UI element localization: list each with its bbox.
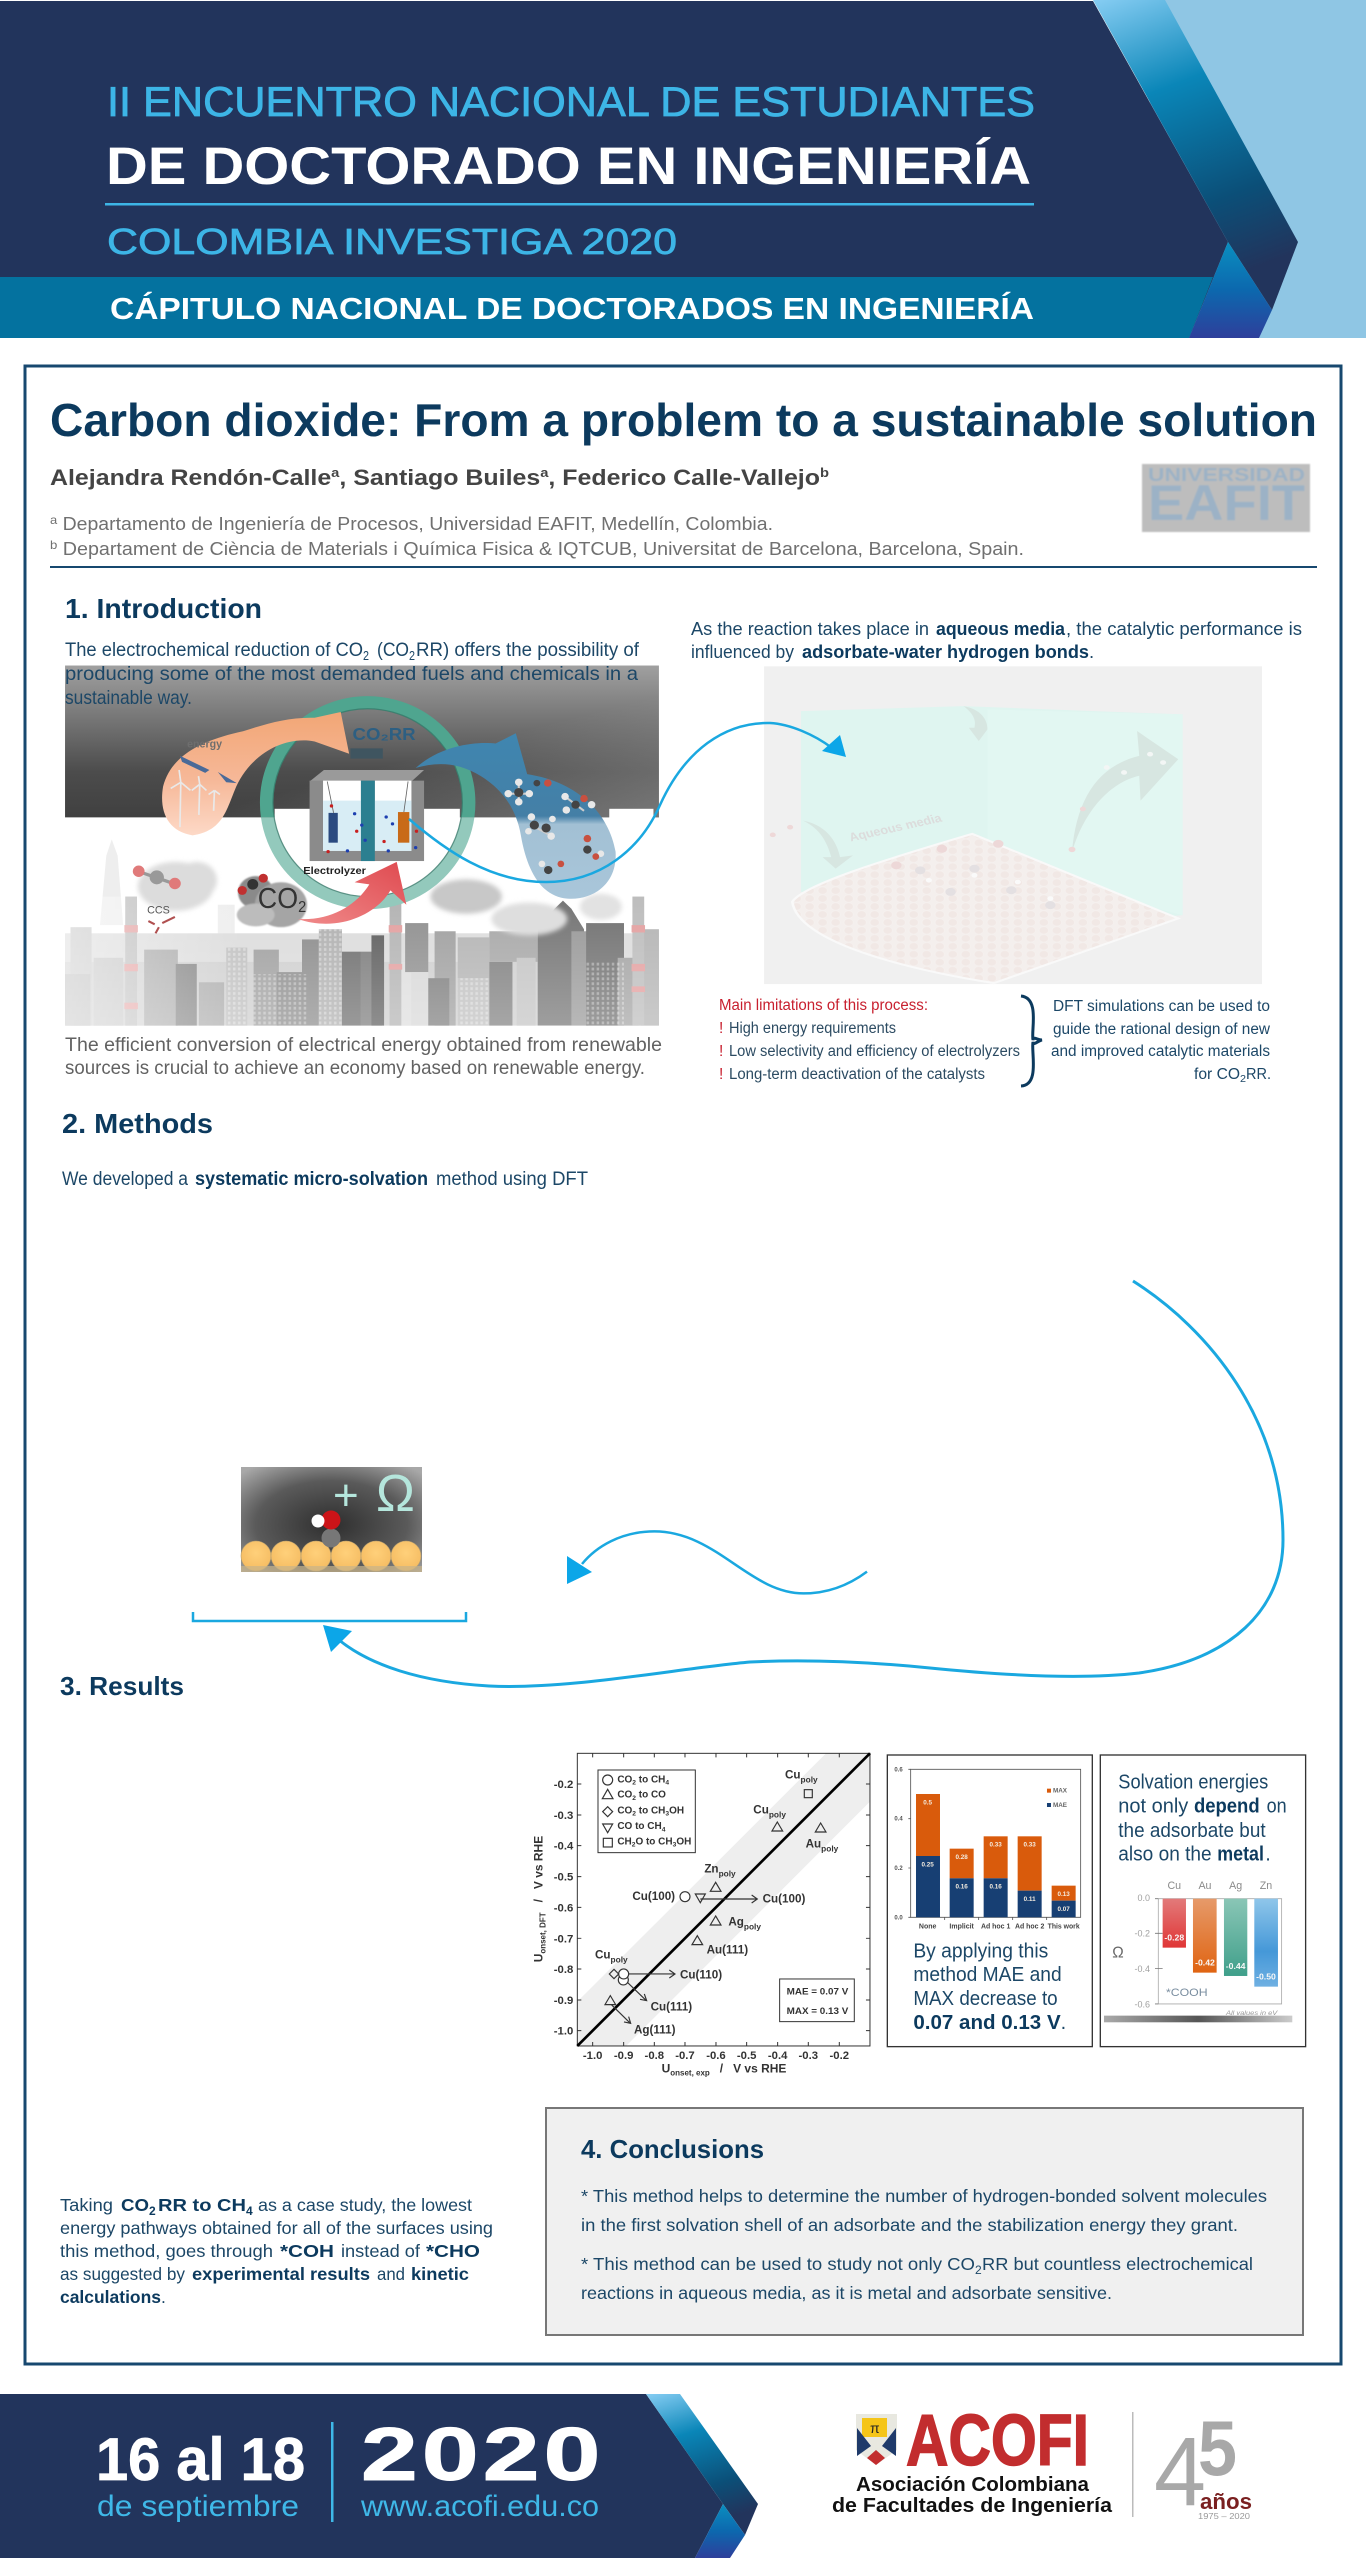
diagram: CO2RR cycle over city xyxy=(65,666,659,1026)
image: solvation correction adsorbate: + xyxy=(333,1471,359,1520)
legend: 4 xyxy=(665,1780,669,1787)
text: intro paragraph: producing some of the most demanded fuels and chemicals in a xyxy=(65,663,638,685)
x axis tick labels: -0.3 xyxy=(799,2050,818,2062)
legend: CO xyxy=(617,1774,632,1785)
label: CO2: 2 xyxy=(298,899,306,916)
logo: 45 años xyxy=(1154,2404,1252,2526)
error stats box: MAE = 0.07 V xyxy=(787,1986,848,1996)
text: DFT simulations: RR. xyxy=(1246,1066,1271,1083)
text: conclusion bullets xyxy=(581,2186,1267,2303)
text: intro paragraph: RR) offers the possibility of xyxy=(416,639,640,661)
bar chart: Omega per metal: *COOH xyxy=(1166,1987,1208,1999)
bar chart: 0.28 xyxy=(955,1854,968,1861)
skyline xyxy=(65,897,659,1026)
text: efficient conversion: The efficient conversion of electrical energy obtained from renewable xyxy=(65,1034,662,1056)
arrow: captured CO2 xyxy=(298,862,406,924)
text: case study: Taking xyxy=(60,2195,113,2215)
text: MAE and MAX conclusion: method MAE and xyxy=(913,1964,1062,1986)
text: case study: energy pathways obtained for all of the surfaces using xyxy=(60,2218,493,2238)
bar chart: None xyxy=(919,1924,937,1931)
data labels: poly xyxy=(821,1843,839,1853)
date: 16 al 18 xyxy=(96,2426,305,2493)
arrow: long curve to bracket xyxy=(323,1281,1283,1686)
legend: 3 xyxy=(673,1842,677,1849)
text: DFT simulations: for CO xyxy=(1194,1066,1240,1083)
legend: OH xyxy=(676,1836,691,1847)
legend: CH xyxy=(617,1836,632,1847)
logo: 45 años: 1975 – 2020 xyxy=(1198,2512,1251,2521)
error stats box xyxy=(780,1979,854,2022)
text: aqueous media: aqueous media xyxy=(936,618,1066,639)
text: case study: CO xyxy=(121,2195,149,2215)
heading: chapter band: CÁPITULO NACIONAL DE DOCTORADOS EN INGENIERÍA xyxy=(110,291,1034,326)
text: conclusion bullets: * This method can be used to study not only CO xyxy=(581,2254,975,2274)
x axis title: / V vs RHE xyxy=(710,2062,786,2076)
text: case study: this method, goes through xyxy=(60,2241,273,2261)
bar chart: Omega per metal: -0.2 xyxy=(1134,1929,1150,1939)
bar chart: Ad hoc 2 xyxy=(1015,1924,1044,1931)
heading: event name line 2: DE DOCTORADO EN INGENIERÍA xyxy=(106,136,1031,196)
text: case study: 2 xyxy=(149,2204,156,2218)
bar chart: 0.33 xyxy=(1023,1842,1036,1849)
text: methods intro: systematic micro-solvation xyxy=(195,1169,428,1190)
bar chart: 0.13 xyxy=(1057,1891,1070,1898)
text: case study: as suggested by xyxy=(60,2264,185,2284)
legend: 2 xyxy=(632,1795,636,1802)
text: solvation energies: the adsorbate but xyxy=(1118,1820,1266,1842)
text: solvation energies: not only xyxy=(1118,1796,1188,1818)
legend: CO xyxy=(617,1790,632,1801)
electrolyzer cell xyxy=(310,748,424,861)
error stats box: MAX = 0.13 V xyxy=(787,2006,848,2016)
text: main limitations: ! xyxy=(719,1043,723,1060)
icon: product molecules xyxy=(504,779,604,874)
text: case study: *CHO xyxy=(426,2241,480,2261)
bar chart: Omega per metal xyxy=(1104,1880,1292,2022)
text: conclusion bullets: 2 xyxy=(975,2263,982,2277)
bar chart: Ad hoc 1 xyxy=(981,1924,1010,1931)
footer banner xyxy=(0,2394,758,2558)
text: case study xyxy=(60,2195,493,2307)
data labels: Zn xyxy=(704,1863,719,1876)
bar chart: Omega per metal: Ag xyxy=(1229,1880,1242,1892)
text: DFT simulations xyxy=(1051,998,1271,1085)
bar chart: Omega per metal: Ω xyxy=(1112,1944,1124,1961)
data labels: Cu xyxy=(595,1948,611,1961)
data labels: poly xyxy=(744,1921,761,1931)
x axis tick labels: -0.6 xyxy=(706,2050,726,2062)
affiliations: Departament de Ciència de Materials i Química Fisica & IQTCUB, Universitat de Barcelona, Barcelona, Spain. xyxy=(57,539,1024,559)
x axis tick labels: -0.9 xyxy=(614,2050,633,2062)
y axis tick labels: -0.8 xyxy=(554,1964,573,1976)
bar chart: Omega per metal: Zn xyxy=(1260,1880,1272,1892)
bar chart: 0.07 xyxy=(1057,1906,1070,1913)
poster title: Carbon dioxide: From a problem to a sustainable solution xyxy=(50,394,1317,446)
bar chart: 0.0 xyxy=(894,1915,903,1921)
text: aqueous media: adsorbate-water hydrogen bonds xyxy=(802,641,1089,662)
text: intro paragraph: (CO xyxy=(377,639,409,661)
text: case study: 4 xyxy=(246,2204,253,2218)
y axis tick labels: -0.6 xyxy=(554,1902,573,1914)
text: MAE and MAX conclusion xyxy=(913,1940,1066,2034)
panel: solvation energies xyxy=(1100,1755,1306,2047)
text: intro paragraph: The electrochemical reduction of CO xyxy=(65,639,363,661)
bar chart: Omega per metal: -0.4 xyxy=(1134,1964,1150,1974)
logo: Universidad EAFIT: EAFIT xyxy=(1148,475,1305,531)
heading: 1. Introduction: 1. Introduction xyxy=(65,593,262,624)
affiliations: a xyxy=(50,513,58,527)
year: 2020 xyxy=(361,2412,600,2496)
image: solvation correction adsorbate: Ω xyxy=(376,1465,415,1523)
x axis tick labels: -0.5 xyxy=(737,2050,756,2062)
authors: , Santiago Builes xyxy=(339,465,540,490)
text: main limitations: High energy requirements xyxy=(729,1020,896,1037)
logo: 45 años: 4 xyxy=(1154,2417,1206,2526)
bar chart: 0.6 xyxy=(894,1767,903,1773)
icon: CO2 molecules xyxy=(133,866,268,933)
label: energy: energy xyxy=(187,739,223,751)
text: main limitations: ! xyxy=(719,1020,723,1037)
authors: a xyxy=(331,465,340,480)
bar chart: 0.2 xyxy=(894,1866,903,1872)
legend: O to CH xyxy=(635,1836,673,1847)
header banner xyxy=(0,0,1366,338)
affiliations xyxy=(50,513,1024,559)
legend: CO to CH xyxy=(617,1821,662,1832)
text: DFT simulations: DFT simulations can be used to xyxy=(1053,998,1270,1015)
text: case study: calculations xyxy=(60,2287,161,2307)
data labels: Cu xyxy=(785,1768,801,1781)
label: Aqueous media: Aqueous media xyxy=(847,811,944,844)
bar chart: Omega per metal: Cu xyxy=(1167,1880,1181,1892)
cycle ring xyxy=(267,703,469,903)
text: methods intro: We developed a xyxy=(62,1169,188,1190)
bracket xyxy=(193,1612,466,1621)
data labels: Cu xyxy=(753,1803,769,1816)
text: case study: instead of xyxy=(341,2241,420,2261)
icon: ACOFI shield: π xyxy=(870,2420,880,2436)
authors xyxy=(50,465,829,490)
legend: 3 xyxy=(665,1811,669,1818)
y axis tick labels xyxy=(554,1779,574,2038)
y axis tick labels: -0.9 xyxy=(554,1995,573,2007)
text: efficient conversion: sources is crucial to achieve an economy based on renewable energy. xyxy=(65,1057,645,1079)
legend: CO xyxy=(617,1805,632,1816)
text: case study: and xyxy=(377,2264,405,2284)
data labels: Cu(100) xyxy=(763,1892,806,1905)
x axis tick labels: -0.8 xyxy=(645,2050,664,2062)
text: DFT simulations: 2 xyxy=(1240,1074,1246,1085)
arrow: renewable energy xyxy=(162,712,349,835)
chart: onset potential parity plot xyxy=(532,1753,870,2078)
bar chart: 0.16 xyxy=(955,1884,968,1891)
heading: 3. Results: 3. Results xyxy=(60,1671,184,1701)
text: case study: *COH xyxy=(280,2241,334,2261)
logo: ACOFI: ACOFI xyxy=(906,2401,1089,2481)
text: main limitations: Low selectivity and efficiency of electrolyzers xyxy=(729,1043,1020,1060)
logo: ACOFI xyxy=(832,2401,1113,2517)
text: conclusion bullets: * This method helps to determine the number of hydrogen-bonded solvent molecules xyxy=(581,2186,1267,2206)
bar chart: Omega per metal: Au xyxy=(1198,1880,1212,1892)
y axis title: onset, DFT xyxy=(539,1912,548,1954)
text: aqueous media: As the reaction takes place in xyxy=(691,618,929,639)
data labels: poly xyxy=(611,1954,628,1964)
image: solvation correction adsorbate xyxy=(241,1465,422,1572)
bar chart: 0.16 xyxy=(989,1884,1002,1891)
text: main limitations xyxy=(719,997,1020,1083)
label: CO2: CO xyxy=(258,883,302,915)
logo: 45 años: 5 xyxy=(1198,2404,1237,2492)
bar chart: Omega per metal: -0.42 xyxy=(1195,1957,1215,1967)
affiliations: b xyxy=(50,538,58,552)
legend: to CO xyxy=(636,1790,666,1801)
arrow: products xyxy=(416,733,616,899)
text: solvation energies: metal xyxy=(1217,1844,1264,1866)
text: aqueous media: . xyxy=(1089,641,1094,662)
arrow: wave to adsorbate xyxy=(567,1531,867,1593)
bar chart: MAE xyxy=(1053,1802,1067,1809)
text: aqueous media: influenced by xyxy=(691,641,795,662)
y axis tick labels: -1.0 xyxy=(554,2026,573,2038)
arrows in aqueous media xyxy=(803,706,1178,869)
text: case study: kinetic xyxy=(411,2264,469,2284)
logo: 45 años: años xyxy=(1200,2489,1252,2514)
heading: 4. Conclusions: 4. Conclusions xyxy=(581,2134,764,2164)
text: MAE and MAX conclusion: . xyxy=(1061,2012,1066,2034)
authors: , Federico Calle-Vallejo xyxy=(548,465,820,490)
text: solvation energies: depend xyxy=(1194,1796,1260,1818)
text: methods intro xyxy=(62,1169,588,1190)
text: main limitations: Long-term deactivation of the catalysts xyxy=(729,1066,985,1083)
bar chart xyxy=(894,1767,1081,1931)
legend: to CH xyxy=(636,1805,665,1816)
bar chart: Implicit xyxy=(949,1924,975,1931)
data labels: Cu(100) xyxy=(632,1890,675,1903)
bar chart: 0.11 xyxy=(1024,1896,1036,1903)
panel: conclusions xyxy=(546,2108,1303,2335)
icon: ACOFI shield xyxy=(856,2414,897,2465)
legend: 2 xyxy=(632,1780,636,1787)
text: conclusion bullets: in the first solvation shell of an adsorbate and the stabilization energy they grant. xyxy=(581,2215,1238,2235)
logo: ACOFI: de Facultades de Ingeniería xyxy=(832,2495,1113,2517)
text: solvation energies: also on the xyxy=(1118,1844,1212,1866)
x axis tick labels xyxy=(583,2050,849,2062)
x axis title: U xyxy=(662,2062,670,2076)
main poster frame xyxy=(25,366,1341,2364)
diagram: aqueous media catalytic surface xyxy=(764,666,1262,984)
text: MAE and MAX conclusion: 0.07 and 0.13 V xyxy=(913,2012,1061,2034)
y axis tick labels: -0.4 xyxy=(554,1841,574,1853)
brace xyxy=(1021,996,1042,1086)
y axis tick labels: -0.3 xyxy=(554,1810,573,1822)
bar chart: Omega per metal: -0.6 xyxy=(1134,1999,1150,2009)
data arrows xyxy=(612,1895,757,2023)
y axis tick labels: -0.2 xyxy=(554,1779,573,1791)
text: conclusion bullets: RR but countless electrochemical xyxy=(982,2254,1253,2274)
text: DFT simulations: guide the rational design of new xyxy=(1053,1021,1271,1038)
text: solvation energies: on xyxy=(1267,1796,1287,1818)
text: solvation energies: . xyxy=(1265,1844,1271,1866)
text: case study: RR to CH xyxy=(158,2195,246,2215)
logo: Universidad EAFIT: UNIVERSIDAD xyxy=(1148,465,1305,485)
bar chart: 0.4 xyxy=(894,1816,903,1822)
authors: a xyxy=(540,465,549,480)
icons: wind turbines and solar panels xyxy=(171,756,237,827)
bar chart: MAX xyxy=(1053,1788,1068,1795)
text: conclusion bullets: reactions in aqueous media, as it is metal and adsorbate sensitive. xyxy=(581,2283,1112,2303)
bar chart: 0.25 xyxy=(921,1861,934,1868)
heading: event name line 1: II ENCUENTRO NACIONAL DE ESTUDIANTES xyxy=(107,78,1035,125)
data labels: Au xyxy=(806,1837,821,1850)
x axis tick labels: -0.7 xyxy=(675,2050,695,2062)
bar chart: Omega per metal: All values in eV xyxy=(1225,2010,1278,2017)
text: case study: as a case study, the lowest xyxy=(258,2195,472,2215)
bar chart: This work xyxy=(1048,1924,1080,1931)
y axis tick labels: -0.5 xyxy=(554,1872,573,1884)
bar chart: Omega per metal: -0.50 xyxy=(1256,1972,1276,1982)
text: methods intro: method using DFT xyxy=(436,1169,588,1190)
legend: 2 xyxy=(632,1811,636,1818)
catalyst slab xyxy=(792,834,1178,983)
data labels: Au(111) xyxy=(707,1943,748,1956)
bar chart: Omega per metal: -0.44 xyxy=(1226,1961,1246,1971)
text: aqueous media: , the catalytic performance is xyxy=(1066,618,1302,639)
data labels: Ag xyxy=(728,1915,744,1928)
authors: b xyxy=(820,465,829,480)
text: MAE and MAX conclusion: By applying this xyxy=(913,1940,1048,1962)
text: main limitations: Main limitations of this process: xyxy=(719,997,928,1014)
text: aqueous media xyxy=(691,618,1302,662)
data labels: poly xyxy=(769,1809,786,1819)
text: solvation energies xyxy=(1118,1772,1287,1866)
text: intro paragraph: 2 xyxy=(409,648,415,663)
legend: OH xyxy=(669,1805,684,1816)
label: Electrolyzer: Electrolyzer xyxy=(303,866,366,877)
heading: Colombia Investiga: COLOMBIA INVESTIGA 2020 xyxy=(107,221,677,262)
legend xyxy=(598,1770,695,1853)
panel: MAE and MAX bar chart xyxy=(887,1755,1092,2047)
data labels: Ag(111) xyxy=(634,2023,676,2036)
website: www.acofi.edu.co xyxy=(360,2490,599,2523)
text: efficient conversion xyxy=(65,1034,662,1079)
text: case study: experimental results xyxy=(192,2264,370,2284)
text: main limitations: ! xyxy=(719,1066,723,1083)
data labels: Cu(111) xyxy=(651,2000,692,2013)
bar chart: Omega per metal: -0.28 xyxy=(1164,1932,1184,1942)
legend: to CH xyxy=(636,1774,665,1785)
text: intro paragraph: sustainable way. xyxy=(65,687,192,709)
data labels: Cu(110) xyxy=(680,1968,722,1981)
authors: Alejandra Rendón-Calle xyxy=(50,465,298,490)
data markers xyxy=(605,1790,826,2005)
x axis tick labels: -1.0 xyxy=(583,2050,602,2062)
y axis title: U xyxy=(532,1954,546,1962)
x axis tick labels: -0.2 xyxy=(830,2050,849,2062)
bar chart: 0.5 xyxy=(923,1800,933,1807)
legend: 4 xyxy=(662,1826,666,1833)
heading: 2. Methods: 2. Methods xyxy=(62,1108,213,1139)
y axis title: / V vs RHE xyxy=(532,1836,546,1912)
text: MAE and MAX conclusion: MAX decrease to xyxy=(913,1988,1058,2010)
affiliations: Departamento de Ingeniería de Procesos, Universidad EAFIT, Medellín, Colombia. xyxy=(57,514,773,534)
text: intro paragraph: 2 xyxy=(363,648,369,663)
text: intro paragraph xyxy=(65,639,640,709)
data labels xyxy=(595,1768,839,2036)
label: CCS: CCS xyxy=(147,904,170,917)
month: de septiembre xyxy=(97,2490,299,2523)
bar chart: 0.33 xyxy=(989,1842,1002,1849)
text: solvation energies: Solvation energies xyxy=(1118,1772,1268,1794)
faint towers xyxy=(100,839,576,946)
bar chart: Omega per metal: 0.0 xyxy=(1137,1893,1150,1903)
label: CO2RR: CO₂RR xyxy=(353,723,416,744)
arrow: electrolyzer to aqueous media xyxy=(409,723,846,882)
molecules in aqueous media xyxy=(770,752,1166,852)
text: case study: . xyxy=(161,2287,166,2307)
data labels: poly xyxy=(719,1869,736,1879)
data labels: poly xyxy=(801,1774,818,1784)
x axis tick labels: -0.4 xyxy=(768,2050,788,2062)
smog clouds xyxy=(138,862,622,935)
text: DFT simulations: and improved catalytic materials xyxy=(1051,1043,1270,1060)
logo: ACOFI: Asociación Colombiana xyxy=(856,2474,1090,2496)
x axis title: onset, exp xyxy=(670,2069,710,2078)
y axis tick labels: -0.7 xyxy=(554,1933,573,1945)
legend: 2 xyxy=(632,1842,636,1849)
